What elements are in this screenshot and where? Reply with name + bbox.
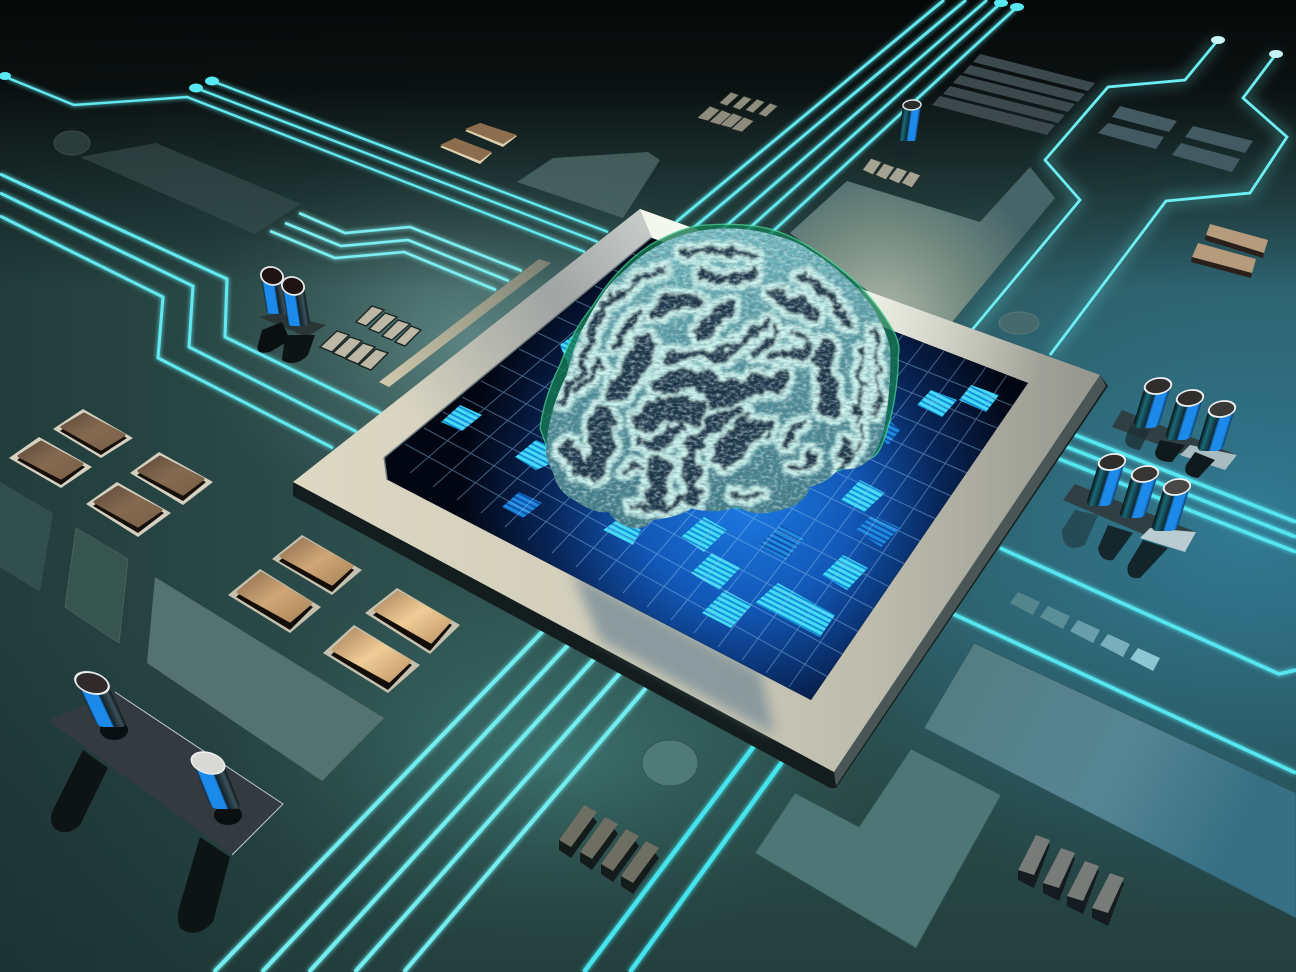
brain dark surface texture [546, 228, 890, 526]
screen lit cells [441, 330, 999, 637]
capacitor one [71, 672, 129, 740]
pad: five grey bars top right [932, 54, 1095, 135]
traces: right of chip [949, 433, 1296, 773]
pad: circle upper left [54, 131, 90, 155]
traces: top centre group [676, 0, 1017, 234]
pad: four rectangles top right [1098, 106, 1253, 172]
board shadow legs [51, 750, 108, 832]
pad: large behind brain [790, 167, 1055, 322]
chip side walls [293, 375, 1108, 788]
traces: top left group [8, 78, 608, 252]
pad: left faint two [65, 528, 128, 643]
brain shadow on the frame [572, 572, 775, 735]
pad: upper left [80, 143, 301, 234]
chip frame [293, 209, 1108, 788]
strip beside frame [379, 259, 551, 387]
capacitors right, back row [1112, 378, 1237, 478]
pad: upper centre [517, 152, 660, 218]
pad: left faint one [0, 482, 53, 592]
capacitor top centre [894, 100, 922, 159]
small chips: upper centre [697, 92, 778, 132]
small chips: below top capacitor [862, 158, 921, 188]
chip frame shading: top left band [293, 209, 652, 482]
brain body [546, 228, 890, 528]
capacitors right, front row [1062, 454, 1196, 578]
copper pads centre group [228, 535, 460, 693]
traces: bottom centre pair [584, 746, 782, 972]
pad: round below chip [642, 740, 698, 786]
capacitor pair left of chip [258, 267, 326, 363]
pad: circle right of chip [999, 312, 1039, 334]
small chips: bottom centre [559, 805, 659, 894]
small chips: left of frame [320, 306, 421, 370]
capacitors lower left on board [48, 672, 283, 933]
pad: large right [924, 643, 1296, 918]
small chips: bottom right [1018, 835, 1124, 926]
pads: five small squares [1010, 592, 1160, 671]
traces: bottom left fan [214, 630, 646, 972]
brain folds with pale rims [560, 250, 878, 508]
chip inner bevel [385, 238, 652, 480]
traces: far left group [0, 174, 381, 448]
screen grid lines [405, 246, 1013, 687]
copper pads right [1191, 224, 1268, 278]
brain light surface texture [546, 228, 890, 528]
pad: lower left large [147, 577, 384, 781]
board plate [48, 692, 283, 855]
brain [540, 215, 910, 535]
brain green halo [540, 224, 899, 508]
capacitor two [188, 752, 243, 825]
small copper pads top [440, 123, 517, 164]
traces: top right with strong glow [972, 40, 1287, 355]
chip screen [385, 238, 1028, 700]
traces: middle left short group [270, 213, 522, 290]
copper pads left group [9, 409, 213, 537]
trace end dots [0, 0, 1283, 92]
pad: L-shaped lower right [755, 749, 1001, 948]
chip frame shading: top right band [640, 209, 1100, 383]
screen blue glow [385, 238, 1028, 700]
chip frame face [293, 209, 1100, 772]
